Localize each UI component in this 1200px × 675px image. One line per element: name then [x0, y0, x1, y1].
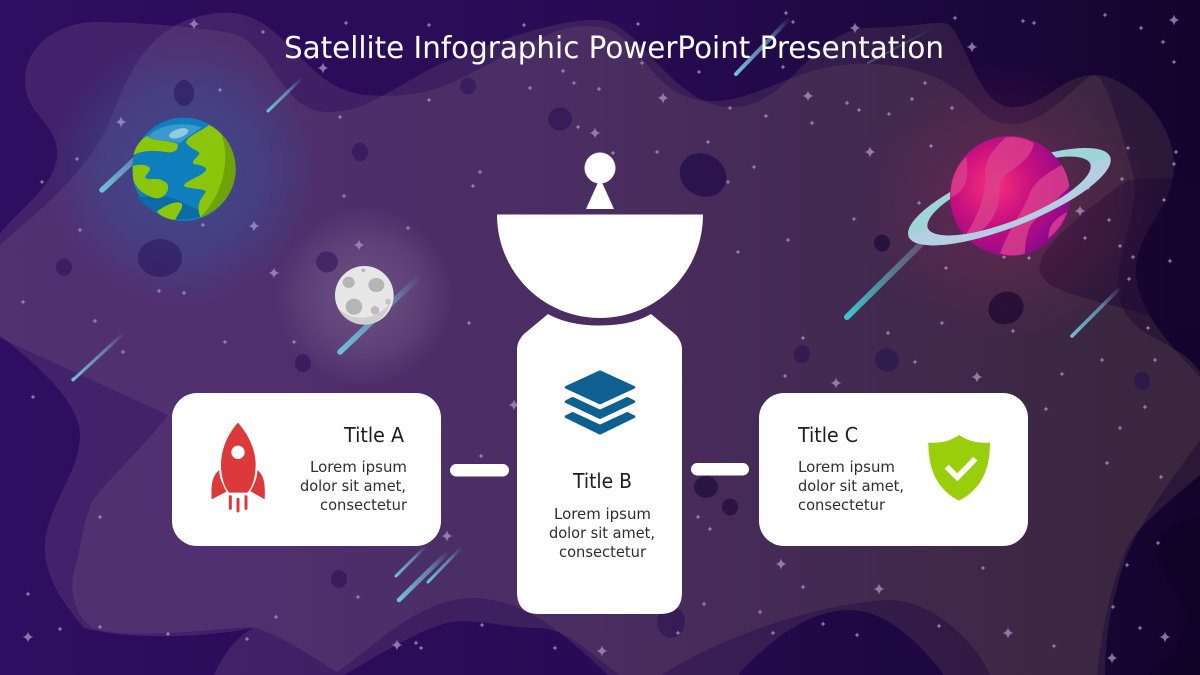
- heading: Title B: Title B: [572, 469, 632, 493]
- text: Title C body: dolor sit amet,: [798, 477, 904, 495]
- text: Title B body: Lorem ipsum: [554, 505, 651, 523]
- text: Title C body: Lorem ipsum: [798, 458, 895, 476]
- panel: Title A: [172, 393, 441, 546]
- connector: A to B: [450, 464, 509, 476]
- icon: rocket: [211, 423, 265, 511]
- text: Title C body: consectetur: [798, 496, 886, 514]
- text: Title B body: dolor sit amet,: [549, 524, 655, 542]
- text: Title A body: dolor sit amet,: [300, 477, 406, 495]
- icon: layers: [566, 372, 634, 433]
- icon: moon: [335, 266, 394, 325]
- heading: Title A: Title A: [343, 423, 404, 447]
- connector: B to C: [691, 463, 749, 476]
- icon: ringed planet: [908, 136, 1111, 256]
- icon: shield check: [928, 435, 990, 501]
- satellite: head circle and cone: [584, 152, 616, 209]
- text: Title B body: consectetur: [559, 543, 647, 561]
- meteors: [73, 17, 1122, 600]
- text: Title A body: [300, 458, 408, 514]
- panel: Title C: [759, 393, 1028, 546]
- panel: center Title B: [517, 314, 682, 614]
- text: Title A body: consectetur: [320, 496, 408, 514]
- text: Title C body: [798, 458, 904, 514]
- title: Satellite Infographic PowerPoint Presentation: [284, 31, 944, 66]
- satellite: dish: [497, 214, 703, 318]
- icon: earth planet: [132, 118, 236, 221]
- heading: Title C: Title C: [797, 423, 858, 447]
- text: Title B body: [549, 505, 655, 561]
- asteroids: [56, 78, 1150, 638]
- text: Title A body: Lorem ipsum: [310, 458, 407, 476]
